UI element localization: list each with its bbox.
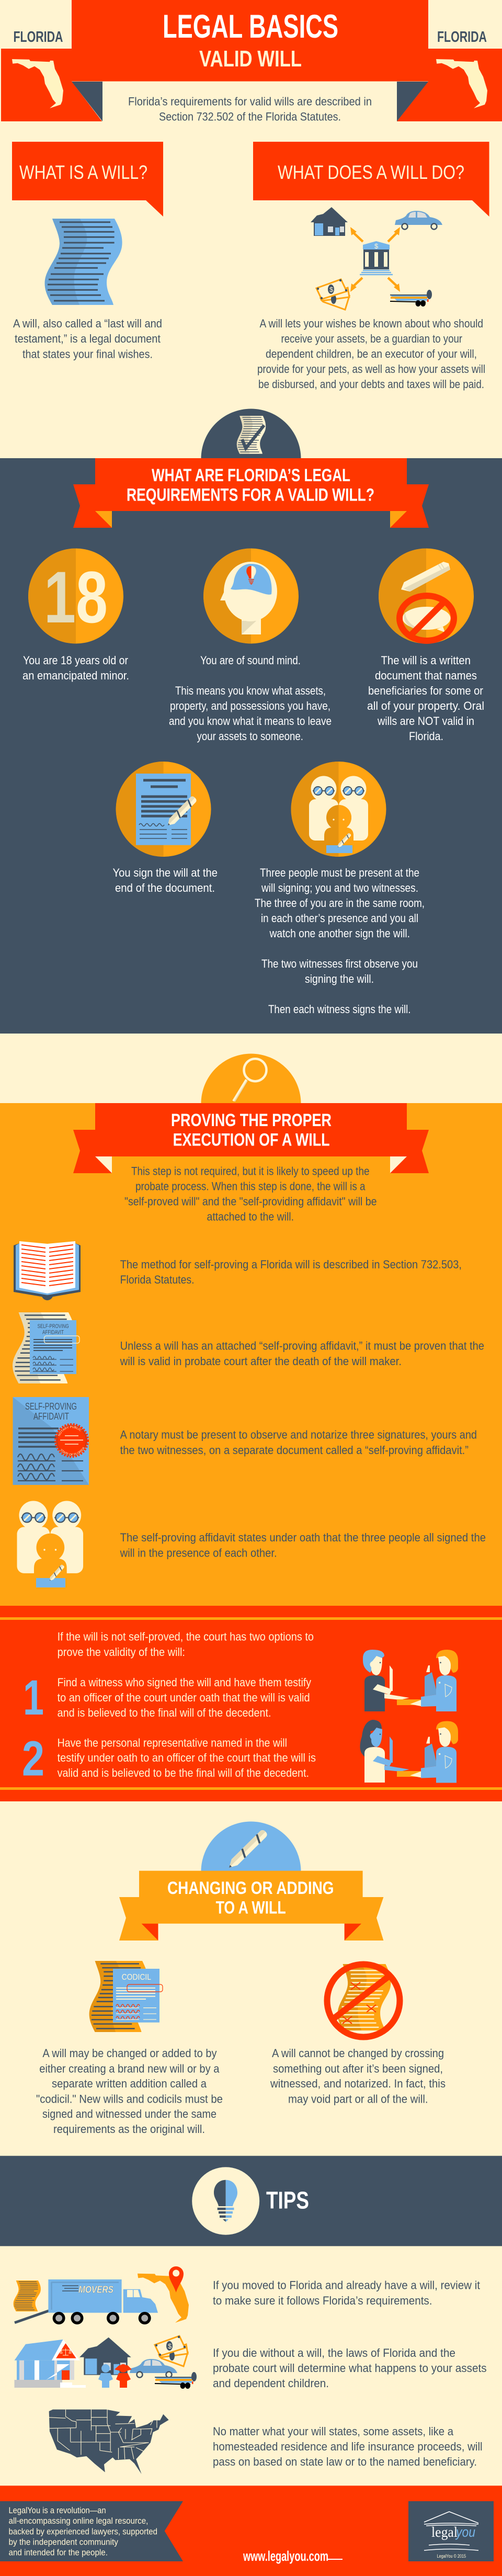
icon: notarized affidavit: AFFIDAVIT (33, 1411, 69, 1422)
text: cannot be changed: witnessed, and notarized. In fact, this (270, 2077, 446, 2090)
option 2 text: valid and is believed to be the final will of the decedent. (58, 1766, 309, 1779)
icon: florida with pin (138, 2266, 189, 2323)
option 2 text: testify under oath to an officer of the court that the will is (58, 1751, 316, 1764)
panel: tips heading (0, 2156, 502, 2246)
text: may be changed: "codicil." New wills and codicils must be (36, 2092, 223, 2106)
icon: magnifier badge (201, 1053, 301, 1154)
text: three people: in each other’s presence and you all (261, 912, 418, 925)
logo: legal (431, 2524, 458, 2540)
about banner: all-encompassing online legal resource, (8, 2516, 148, 2526)
body text: that states your final wishes. (22, 347, 153, 361)
intro text: If the will is not self-proved, the court has two options to (58, 1630, 314, 1643)
icon: car (395, 211, 442, 229)
icon: moving truck (15, 2279, 158, 2324)
text: sound mind: property, and possessions you have, (170, 699, 330, 712)
icon: long scroll (45, 219, 122, 305)
body text: testament,” is a legal document (15, 332, 161, 345)
icon: will scroll (14, 2280, 41, 2311)
option 1 text: Find a witness who signed the will and have them testify (58, 1676, 311, 1689)
text: probate court will determine what happens to your assets (213, 2362, 487, 2375)
text: If you die without a will, the laws of Florida and the (213, 2346, 455, 2359)
text: method: The method for self-proving a Florida will is described in Section 732.503, (120, 1258, 462, 1271)
requirement: three people (291, 762, 386, 857)
about banner: by the independent community (8, 2537, 118, 2547)
body text: dependent children, be an executor of your will, (266, 347, 477, 360)
icon: family (98, 2364, 132, 2388)
panel: changing or adding (36, 1821, 446, 2136)
requirement: signing (116, 762, 211, 857)
ribbon heading (73, 458, 429, 528)
option 1 text (58, 1676, 311, 1719)
about banner: LegalYou is a revolution—an (8, 2505, 106, 2515)
icon: money (316, 279, 349, 310)
arrows: assets (350, 227, 400, 292)
text: to make sure it follows Florida’s requirements. (213, 2294, 432, 2307)
icon: house (79, 2337, 131, 2375)
option 1 text: and is believed to the final will of the decedent. (58, 1706, 271, 1719)
icon: three signers (17, 1501, 83, 1587)
text: age: You are 18 years old or (23, 654, 128, 667)
about banner: and intended for the people. (8, 2548, 108, 2558)
option 2 text (58, 1736, 316, 1779)
ribbon heading (73, 1103, 429, 1173)
text: oath (120, 1531, 486, 1560)
text: written document: document that names (375, 669, 477, 682)
notary seal: NOTARY PUBLIC (58, 1426, 82, 1436)
text: may be changed: separate written addition called a (52, 2077, 207, 2090)
icon: statute book (14, 1241, 81, 1300)
about banner (0, 2501, 183, 2561)
text: three people: will signing; you and two witnesses. (261, 881, 418, 894)
text: sound mind: and you know what it means to leave (169, 714, 332, 728)
text: may be changed: A will may be changed or added to by (42, 2047, 217, 2060)
icon: florida map left (12, 59, 63, 108)
text: may be changed: requirements as the original will. (53, 2123, 205, 2136)
text: written document: The will is a written (381, 654, 471, 667)
text: written document: beneficiaries for some or (368, 684, 483, 697)
icon: house (311, 207, 348, 236)
text: may be changed: either creating a brand new will or by a (39, 2062, 220, 2075)
icon: light bulb (192, 2167, 259, 2235)
icon: boat (390, 290, 432, 307)
text: three people: The two witnesses first observe you (261, 957, 418, 970)
text: unless (120, 1340, 484, 1368)
icon: notarized affidavit: SELF-PROVING (25, 1401, 77, 1412)
body text: A will, also called a “last will and (13, 317, 162, 330)
panel: not self-proved (0, 1606, 502, 1801)
intro text: This step is not required, but it is likely to speed up the (131, 1165, 369, 1178)
intro text: attached to the will. (207, 1210, 294, 1223)
tip: moved to Florida (14, 2266, 480, 2324)
intro text: Section 732.502 of the Florida Statutes. (159, 110, 341, 123)
text (213, 2346, 487, 2390)
requirement: age 18 (28, 548, 123, 643)
text: oath: will in the presence of each other. (120, 1547, 277, 1560)
text: written document: all of your property. Oral (367, 699, 484, 712)
text: method: Florida Statutes. (120, 1273, 195, 1286)
icon: will with codicil (89, 1961, 163, 2032)
text: cannot be changed: may void part or all of the will. (288, 2092, 428, 2106)
icon: bank (360, 241, 393, 275)
icon: pen badge (201, 1821, 301, 1922)
text: signing (113, 866, 218, 894)
panel: proving proper execution (0, 1103, 502, 1606)
intro text (128, 95, 372, 123)
text: signing: end of the document. (115, 881, 215, 894)
subtitle: VALID WILL (199, 46, 302, 72)
text: sound mind (169, 654, 332, 743)
ribbon heading: TO A WILL (216, 1898, 286, 1917)
icon: money (155, 2336, 188, 2366)
icon: car (130, 2359, 177, 2378)
notary seal: STATE OF FLORIDA (60, 1447, 85, 1456)
icon: will with affidavit: SELF-PROVING (38, 1323, 69, 1330)
ribbon heading: PROVING THE PROPER (171, 1110, 332, 1130)
text (213, 2279, 480, 2307)
requirement: written document (379, 548, 474, 643)
about banner: backed by experienced lawyers, supported (8, 2526, 157, 2536)
ribbon heading: CHANGING OR ADDING (167, 1878, 334, 1898)
text: three people (255, 866, 425, 1016)
icon: will with affidavit (13, 1312, 79, 1383)
icon: courthouse (15, 2340, 86, 2388)
illustration: representative and officer (360, 1720, 458, 1783)
logo (408, 2501, 494, 2561)
title: LEGAL BASICS (163, 8, 338, 45)
speech heading: WHAT DOES A WILL DO? (278, 162, 464, 183)
text: may be changed: signed and witnessed under the same (42, 2107, 216, 2120)
footer (0, 2486, 502, 2576)
text: written document: Florida. (409, 730, 443, 743)
text: written document (367, 654, 484, 743)
text: pass on based on state law or to the named beneficiary. (213, 2455, 477, 2468)
text: cannot be changed: A will cannot be changed by crossing (272, 2047, 444, 2060)
body text: receive your assets, be a guardian to your (281, 332, 462, 345)
text: three people: Three people must be present at the (260, 866, 419, 879)
intro text (58, 1630, 314, 1659)
text: sound mind: You are of sound mind. (200, 654, 301, 667)
notary seal (54, 1423, 89, 1458)
body text (13, 317, 162, 361)
logo: you (455, 2524, 475, 2540)
text: three people: watch one another sign the will. (269, 927, 410, 940)
icon: US map (48, 2410, 169, 2474)
icon: moving truck: MOVERS (78, 2285, 113, 2295)
text: homesteaded residence and life insurance proceeds, will (213, 2440, 483, 2453)
intro text: Florida’s requirements for valid wills are described in (128, 95, 372, 108)
illustration: witness and officer (363, 1650, 458, 1711)
ribbon heading: REQUIREMENTS FOR A VALID WILL? (127, 485, 374, 505)
text: method (120, 1258, 462, 1286)
state label left: FLORIDA (14, 29, 63, 46)
number 2: 2 (22, 1731, 44, 1787)
ribbon heading (119, 1871, 383, 1940)
speech heading (12, 142, 163, 217)
text: three people: signing the will. (305, 972, 374, 985)
option 2 text: Have the personal representative named in the will (58, 1736, 287, 1749)
icon: crossed-out will (327, 1964, 400, 2037)
logo: LegalYou © 2015 (437, 2554, 466, 2559)
tip: dying without a will (15, 2336, 487, 2390)
number 1: 1 (23, 1670, 44, 1726)
ribbon heading: WHAT ARE FLORIDA’S LEGAL (152, 466, 350, 485)
speech heading: WHAT IS A WILL? (19, 162, 147, 183)
icon: scroll badge (201, 409, 301, 508)
text: sound mind: This means you know what assets, (175, 684, 326, 697)
text: If you moved to Florida and already have a will, review it (213, 2279, 480, 2292)
text: and dependent children. (213, 2377, 329, 2390)
website url: www.legalyou.com (243, 2548, 328, 2564)
header banner (1, 0, 502, 121)
text: cannot be changed: something out after it’s been signed, (273, 2062, 443, 2075)
text: cannot be changed (270, 2047, 446, 2106)
icon: will with affidavit: AFFIDAVIT (42, 1330, 64, 1336)
option 1 text: to an officer of the court under oath that the will is valid (58, 1691, 310, 1704)
text: age (22, 654, 129, 682)
text: three people: Then each witness signs the will. (268, 1003, 411, 1016)
tip: assets outside the will (48, 2410, 483, 2474)
heading: TIPS (266, 2187, 309, 2214)
text (213, 2425, 483, 2468)
text: written document: wills are NOT valid in (377, 714, 474, 728)
icon: florida map right (436, 59, 487, 108)
icon: notarized affidavit (13, 1397, 89, 1485)
icon: bank: $ (374, 242, 379, 250)
body text (257, 317, 485, 391)
panel: legal requirements (0, 458, 502, 1034)
text: notary (120, 1428, 477, 1457)
text: unless: will is valid in probate court after the death of the will maker. (120, 1355, 402, 1368)
icon: boat (155, 2372, 197, 2389)
requirement: age 18: 18 (44, 556, 108, 638)
panel: what is a will (12, 142, 163, 361)
ribbon heading: EXECUTION OF A WILL (173, 1130, 330, 1150)
requirement: sound mind (203, 548, 299, 643)
text: notary: the two witnesses, on a separate document called a “self-proving affidavit.” (120, 1444, 469, 1457)
intro text: "self-proved will" and the "self-providing affidavit" will be (124, 1195, 376, 1208)
intro text: prove the validity of the will: (58, 1646, 185, 1659)
text: signing: You sign the will at the (113, 866, 218, 879)
icon: will with codicil: CODICIL (122, 1973, 151, 1982)
intro text (124, 1165, 376, 1223)
text: sound mind: your assets to someone. (197, 730, 303, 743)
text: age: an emancipated minor. (22, 669, 129, 682)
text: may be changed (36, 2047, 223, 2136)
intro text: probate process. When this step is done, the will is a (135, 1180, 366, 1193)
speech heading (253, 142, 489, 217)
text: three people: The three of you are in the same room, (255, 897, 425, 910)
text: No matter what your will states, some assets, like a (213, 2425, 454, 2438)
panel: what does a will do (253, 142, 489, 391)
